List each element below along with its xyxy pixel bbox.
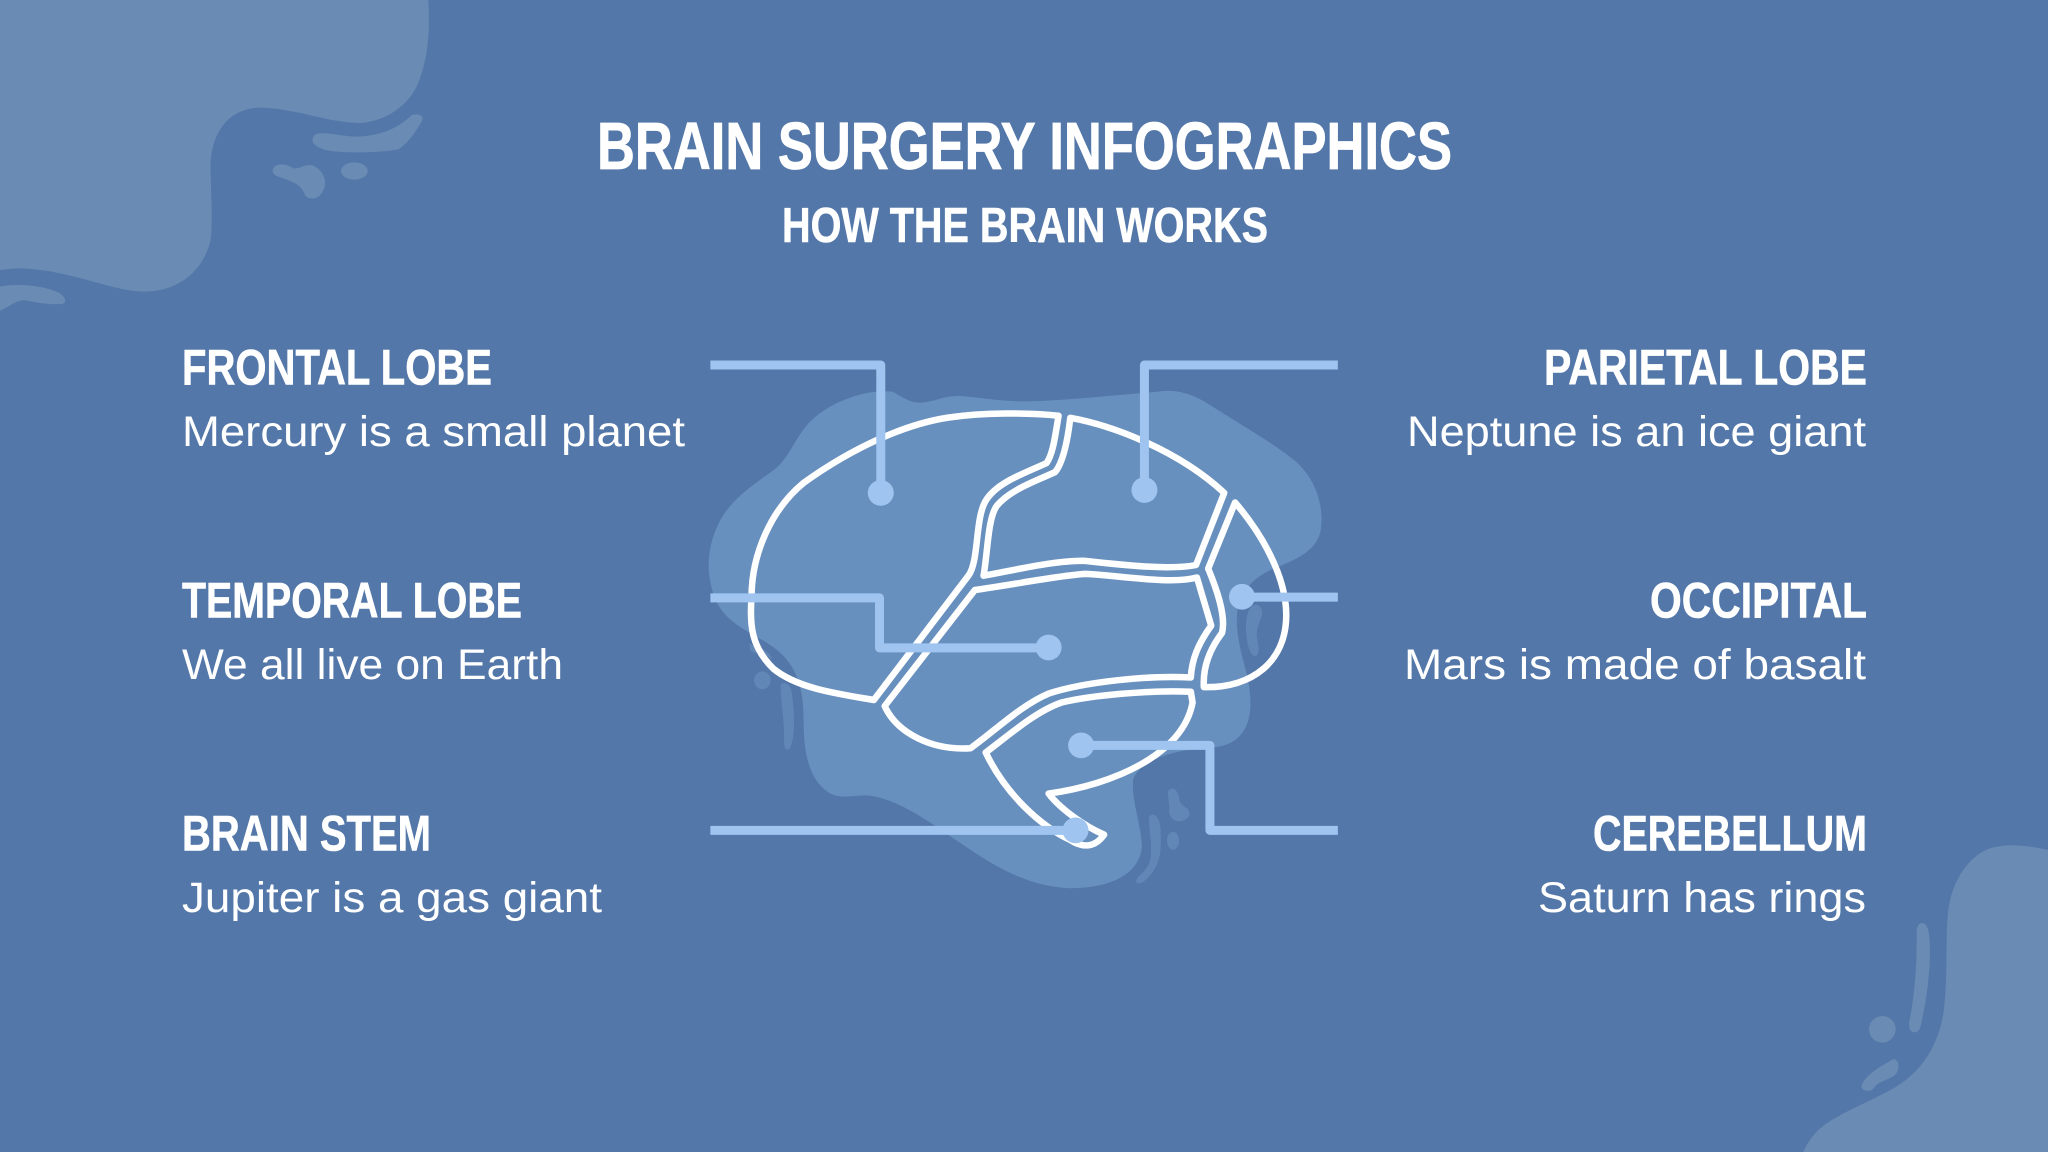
label: parietal lobe	[1407, 340, 1867, 456]
subtitle: HOW THE BRAIN WORKS	[782, 199, 1268, 253]
label: cerebellum	[1538, 806, 1867, 922]
label: occipital: OCCIPITAL	[1650, 572, 1867, 628]
label: brain stem: BRAIN STEM	[182, 806, 431, 862]
brain outline: cerebellum and brain stem	[986, 691, 1193, 845]
connector: parietal lobe	[1131, 365, 1338, 503]
label: occipital: Mars is made of basalt	[1404, 641, 1866, 689]
label: brain stem	[182, 806, 602, 922]
background blob behind brain	[709, 391, 1322, 888]
brain outline: frontal lobe	[751, 413, 1059, 700]
title: BRAIN SURGERY INFOGRAPHICS	[597, 109, 1452, 184]
label: parietal lobe: PARIETAL LOBE	[1544, 340, 1867, 396]
label: temporal lobe	[182, 572, 563, 689]
connector: occipital	[1229, 584, 1338, 610]
brain outline: occipital lobe	[1204, 502, 1286, 687]
connector: brain stem	[710, 817, 1088, 843]
brain outline: temporal lobe	[885, 574, 1211, 748]
connector: temporal lobe	[710, 598, 1062, 660]
brain diagram	[709, 365, 1338, 888]
connector: cerebellum	[1068, 732, 1338, 830]
label: brain stem: Jupiter is a gas giant	[182, 874, 602, 922]
label: parietal lobe: Neptune is an ice giant	[1407, 408, 1866, 456]
label: cerebellum: CEREBELLUM	[1593, 806, 1867, 862]
decoration: bottom-right corner blob	[1803, 845, 2048, 1152]
small background marks near brain	[749, 605, 1262, 883]
label: temporal lobe: We all live on Earth	[182, 641, 563, 689]
label: frontal lobe: FRONTAL LOBE	[182, 340, 492, 396]
label: frontal lobe: Mercury is a small planet	[182, 408, 685, 456]
decoration: top-left corner blob	[0, 0, 429, 311]
brain outline: parietal lobe	[984, 418, 1224, 576]
label: temporal lobe: TEMPORAL LOBE	[182, 572, 522, 628]
label: occipital	[1404, 572, 1867, 689]
connector: frontal lobe	[710, 365, 894, 506]
label: cerebellum: Saturn has rings	[1538, 874, 1866, 922]
label: frontal lobe	[182, 340, 685, 456]
